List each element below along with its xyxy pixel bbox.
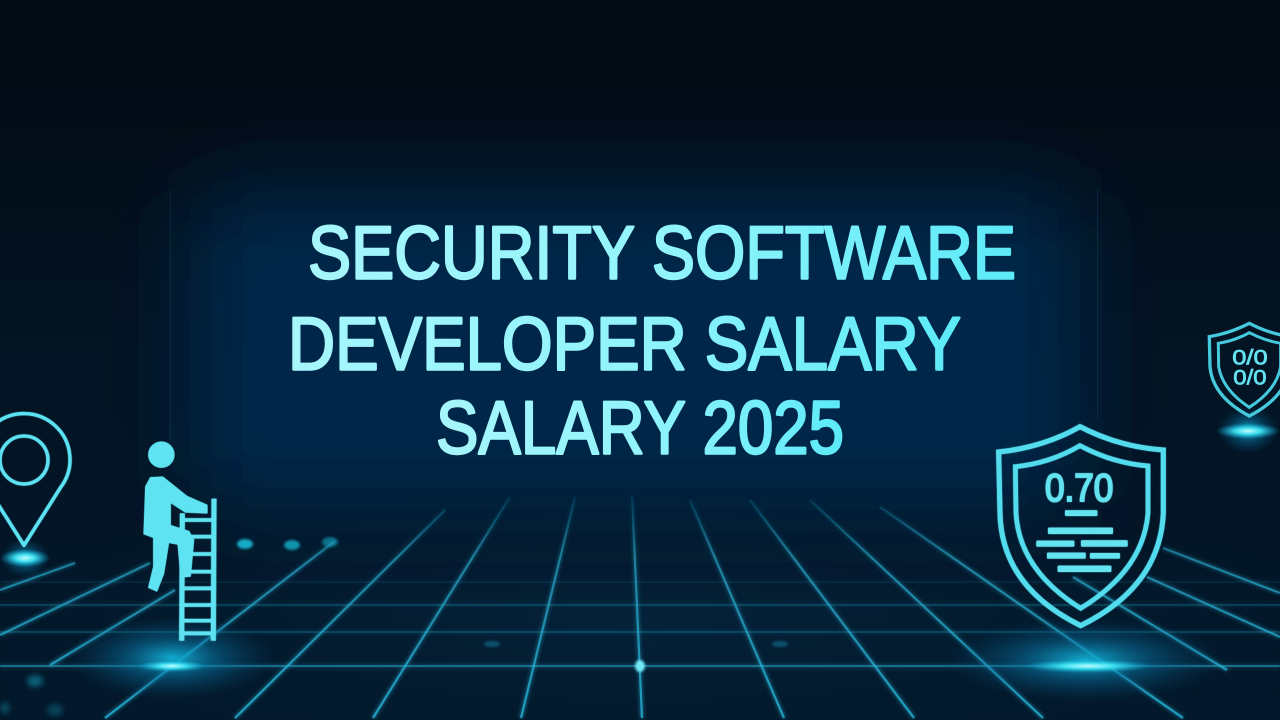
icon: large shield bbox=[945, 427, 1225, 702]
icon: person climbing ladder bbox=[67, 442, 277, 700]
shield value: 0.70 bbox=[1045, 466, 1113, 510]
binary digits: 0/0 bbox=[1233, 366, 1267, 390]
person bbox=[144, 442, 207, 591]
title: SECURITY SOFTWARE bbox=[308, 210, 1016, 294]
glowing floor dots bbox=[0, 537, 788, 716]
binary digits: 0/0 bbox=[1232, 346, 1268, 370]
binary digits bbox=[1232, 346, 1268, 390]
icon: small binary shield bbox=[1209, 323, 1280, 454]
perspective grid floor bbox=[0, 495, 1280, 718]
title: SALARY 2025 bbox=[436, 386, 844, 470]
icon: location pin bbox=[0, 414, 70, 578]
title bbox=[288, 210, 1016, 470]
title: DEVELOPER SALARY bbox=[288, 302, 961, 386]
shield text lines bbox=[1036, 510, 1128, 572]
ladder bbox=[182, 499, 214, 641]
